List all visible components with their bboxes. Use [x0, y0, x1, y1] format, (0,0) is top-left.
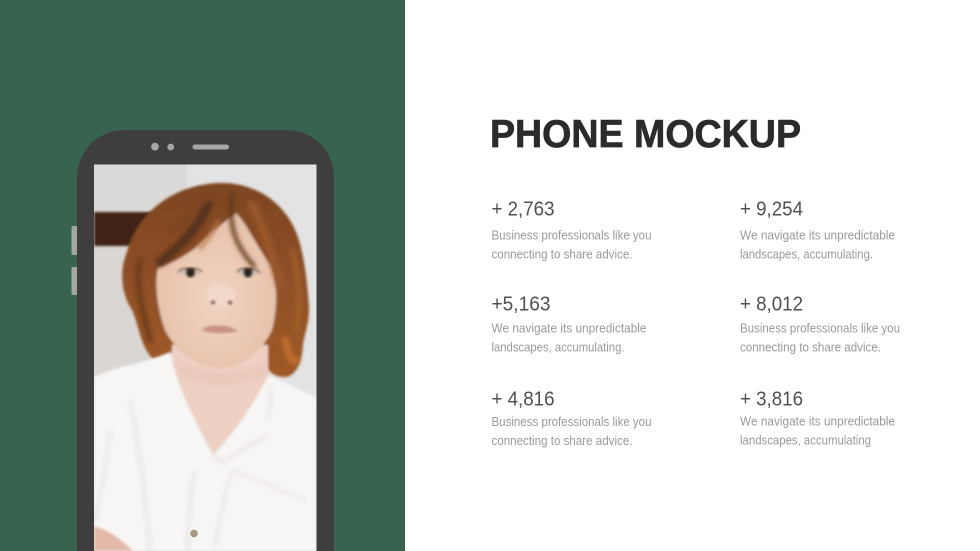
stat: 8,012: + 8,012 [740, 294, 803, 316]
phone camera and speaker [151, 143, 229, 151]
crossed arm [94, 526, 133, 551]
mouth [201, 325, 238, 333]
stat: 8,012: Business professionals like you [740, 320, 900, 336]
shirt [94, 352, 317, 551]
stat: 5,163: landscapes, accumulating. [492, 340, 624, 354]
stat: 4,816: + 4,816 [492, 388, 554, 410]
stat: 9,254: + 9,254 [740, 198, 803, 220]
stat: 2,763 [492, 198, 652, 262]
stat: 9,254 [740, 198, 895, 262]
stat: 4,816: Business professionals like you [492, 414, 652, 429]
stat: 9,254: We navigate its unpredictable [740, 228, 895, 242]
stat: 2,763: connecting to share advice. [492, 246, 632, 262]
eyes [178, 268, 260, 278]
stat: 3,816: + 3,816 [740, 388, 803, 410]
neck shadow [184, 368, 262, 382]
phone mockup [72, 130, 334, 551]
stat: 8,012: connecting to share advice. [740, 340, 881, 354]
stat: 4,816: connecting to share advice. [492, 433, 632, 448]
stat: 8,012 [740, 294, 900, 354]
shirt button [190, 530, 198, 537]
stat: 2,763: Business professionals like you [492, 228, 652, 242]
phone side buttons [72, 226, 78, 295]
stat: 3,816: landscapes, accumulating [740, 432, 871, 448]
neck [172, 345, 268, 454]
hair fringe strands [138, 195, 299, 361]
photo of a red-haired boy [94, 164, 317, 551]
stat: 9,254: landscapes, accumulating. [740, 246, 873, 262]
stat: 5,163 [492, 294, 646, 354]
title: PHONE MOCKUP [490, 113, 801, 156]
shirt folds [96, 385, 305, 551]
stat: 4,816 [492, 388, 652, 448]
stat: 5,163: We navigate its unpredictable [492, 320, 646, 336]
phone body [77, 130, 334, 551]
stat: 5,163: +5,163 [492, 294, 550, 316]
face [156, 213, 276, 368]
stat: 3,816: We navigate its unpredictable [740, 414, 895, 428]
green side panel [0, 0, 405, 551]
stat: 3,816 [740, 388, 895, 448]
stat: 2,763: + 2,763 [492, 198, 554, 220]
hair mass [122, 183, 309, 377]
nose [208, 285, 234, 306]
